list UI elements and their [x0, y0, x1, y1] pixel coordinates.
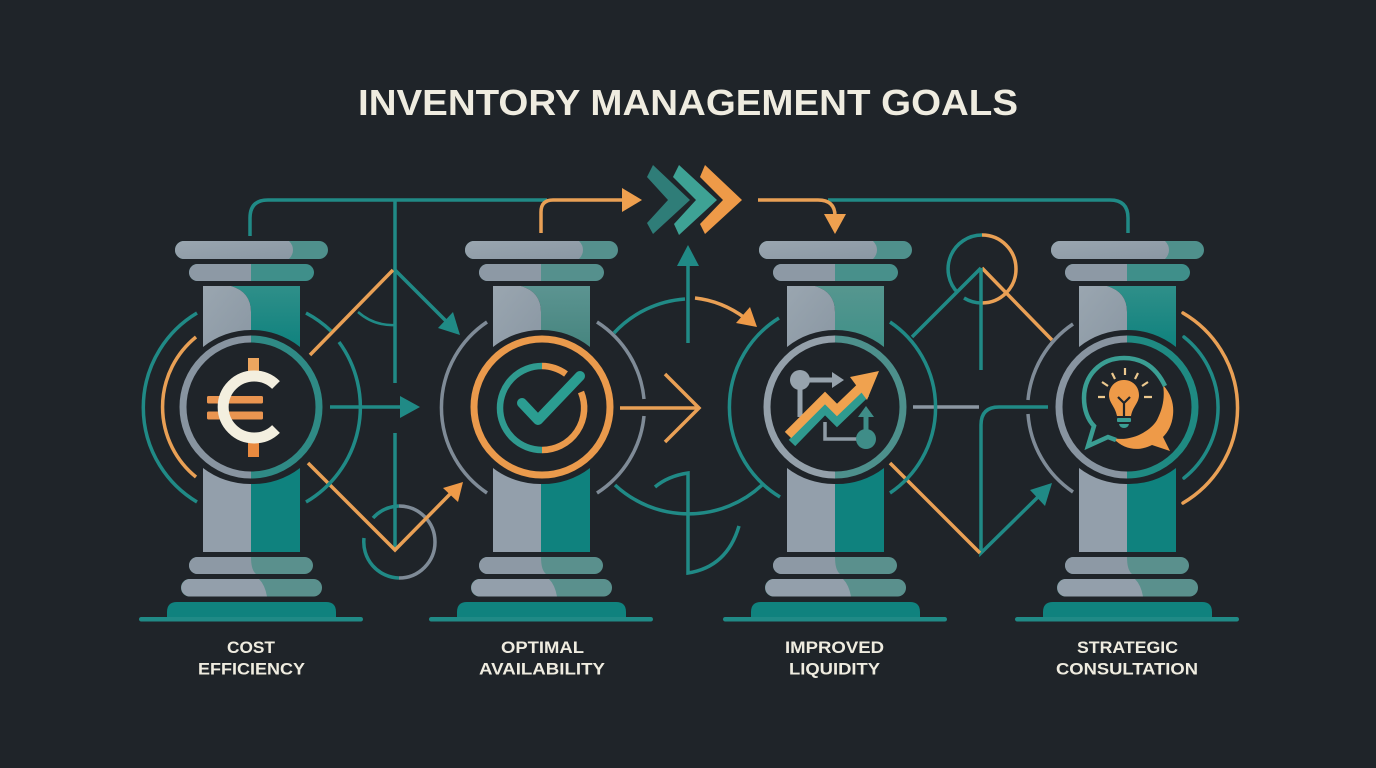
pillar: strategic consultation	[1015, 241, 1239, 622]
side arcs: pillar 1	[143, 313, 360, 502]
label: strategic consultation: CONSULTATION	[1056, 660, 1198, 678]
icon: chevrons	[647, 165, 742, 235]
connector network: top routing lines	[250, 200, 1128, 236]
connector diagram: pillar 2 to pillar 3	[614, 245, 762, 573]
arrow: orange head down to pillar 3	[824, 214, 846, 234]
connector diagram: pillar 1 to pillar 2	[308, 200, 463, 578]
icon: light bulb in speech bubbles	[1084, 358, 1173, 451]
label: strategic consultation	[1056, 638, 1198, 678]
label: strategic consultation: STRATEGIC	[1077, 638, 1178, 657]
side arcs: pillar 4	[1028, 313, 1238, 503]
icon: euro	[207, 358, 276, 457]
label: improved liquidity: LIQUIDITY	[789, 660, 881, 678]
side arcs: pillar 3	[729, 318, 936, 497]
label: optimal availability: OPTIMAL	[501, 638, 584, 657]
label: cost efficiency: EFFICIENCY	[198, 660, 306, 678]
label: improved liquidity: IMPROVED	[785, 638, 884, 657]
icon: growth chart	[788, 370, 879, 449]
label: cost efficiency	[198, 638, 306, 678]
label: improved liquidity	[785, 638, 884, 678]
title: INVENTORY MANAGEMENT GOALS	[358, 82, 1018, 123]
connector diagram: pillar 3 to pillar 4	[890, 235, 1052, 553]
icon: check mark	[500, 366, 584, 450]
side arcs: pillar 2	[441, 322, 644, 493]
label: cost efficiency: COST	[227, 638, 276, 657]
pillar: improved liquidity	[723, 241, 947, 622]
label: optimal availability	[479, 638, 606, 678]
arrow: orange head to chevrons	[622, 188, 642, 212]
label: optimal availability: AVAILABILITY	[479, 660, 606, 678]
pillar: cost efficiency	[139, 241, 363, 622]
pillar: optimal availability	[429, 241, 653, 622]
